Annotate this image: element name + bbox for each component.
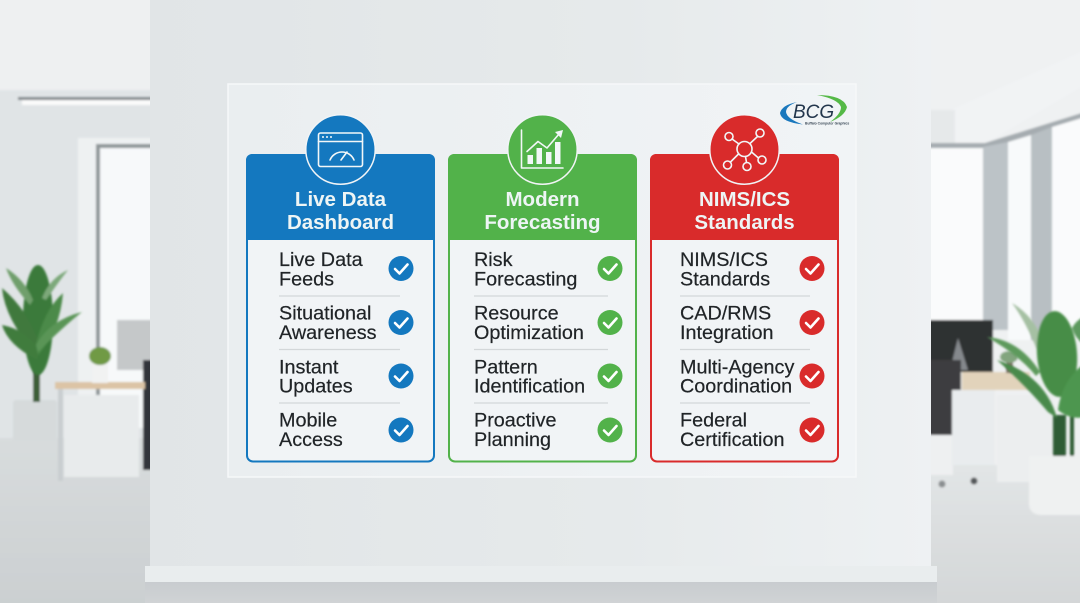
list item: Mobile Access: Mobile — [279, 410, 337, 432]
list item: Resource Optimization — [474, 302, 622, 344]
list item: Risk Forecasting — [474, 249, 622, 290]
list item: Instant Updates: Instant — [279, 356, 339, 378]
list item: Instant Updates — [279, 356, 414, 398]
list item: NIMS/ICS Standards — [680, 249, 824, 290]
panel body: green — [449, 155, 636, 462]
list item: NIMS/ICS Standards: Standards — [680, 268, 770, 290]
list item: Live Data Feeds: Live Data — [279, 249, 363, 271]
list item: Resource Optimization: Resource — [474, 302, 559, 324]
panel: NIMS/ICS Standards — [650, 115, 839, 462]
panel: Modern Forecasting — [448, 115, 637, 462]
list item: Situational Awareness — [279, 302, 414, 344]
heading: NIMS/ICS — [699, 188, 790, 211]
panel body: red — [651, 155, 838, 462]
heading: Modern — [505, 188, 580, 211]
poster board — [228, 84, 856, 477]
list item: Instant Updates: Updates — [279, 376, 353, 398]
icon: dashboard window with gauge — [306, 115, 375, 184]
list item: Multi-Agency Coordination: Multi-Agency — [680, 356, 794, 378]
office background: right — [925, 0, 1080, 603]
list item: Proactive Planning — [474, 410, 622, 451]
icon: growth chart — [508, 115, 577, 184]
heading: Standards — [694, 211, 795, 234]
list item: Proactive Planning: Planning — [474, 429, 551, 451]
list item: Risk Forecasting: Risk — [474, 249, 513, 271]
heading: Forecasting — [484, 211, 601, 234]
list item: Live Data Feeds: Feeds — [279, 268, 334, 290]
office background: left — [0, 0, 155, 603]
logo: BCG: Buffalo Computer Graphics — [805, 122, 849, 126]
header band: red — [650, 154, 839, 240]
icon: network nodes — [710, 115, 779, 184]
plant: right — [987, 303, 1080, 515]
header band: blue — [246, 154, 435, 240]
header band: green — [448, 154, 637, 240]
list item: NIMS/ICS Standards: NIMS/ICS — [680, 249, 768, 271]
list item: CAD/RMS Integration — [680, 302, 824, 344]
heading: Live Data — [295, 188, 387, 211]
list item: Pattern Identification: Identification — [474, 376, 585, 398]
list item: Situational Awareness: Awareness — [279, 322, 377, 344]
list item: Situational Awareness: Situational — [279, 302, 371, 324]
heading: Dashboard — [287, 211, 394, 234]
list item: Federal Certification: Federal — [680, 410, 747, 432]
list item: Federal Certification — [680, 410, 824, 451]
wall — [145, 0, 937, 603]
list item: Mobile Access — [279, 410, 414, 451]
list item: Multi-Agency Coordination — [680, 356, 824, 398]
list item: Mobile Access: Access — [279, 429, 343, 451]
logo: BCG: BCG — [793, 102, 834, 123]
panel body: blue — [247, 155, 434, 462]
list item: Federal Certification: Certification — [680, 429, 784, 451]
list item: Live Data Feeds — [279, 249, 414, 290]
list item: Pattern Identification: Pattern — [474, 356, 538, 378]
list item: Proactive Planning: Proactive — [474, 410, 556, 432]
plant: left — [2, 265, 82, 375]
list item: CAD/RMS Integration: Integration — [680, 322, 773, 344]
list item: CAD/RMS Integration: CAD/RMS — [680, 302, 771, 324]
list item: Risk Forecasting: Forecasting — [474, 268, 577, 290]
logo: BCG — [780, 95, 849, 126]
panel: Live Data Dashboard — [246, 115, 435, 462]
list item: Pattern Identification — [474, 356, 622, 398]
list item: Resource Optimization: Optimization — [474, 322, 584, 344]
list item: Multi-Agency Coordination: Coordination — [680, 376, 792, 398]
